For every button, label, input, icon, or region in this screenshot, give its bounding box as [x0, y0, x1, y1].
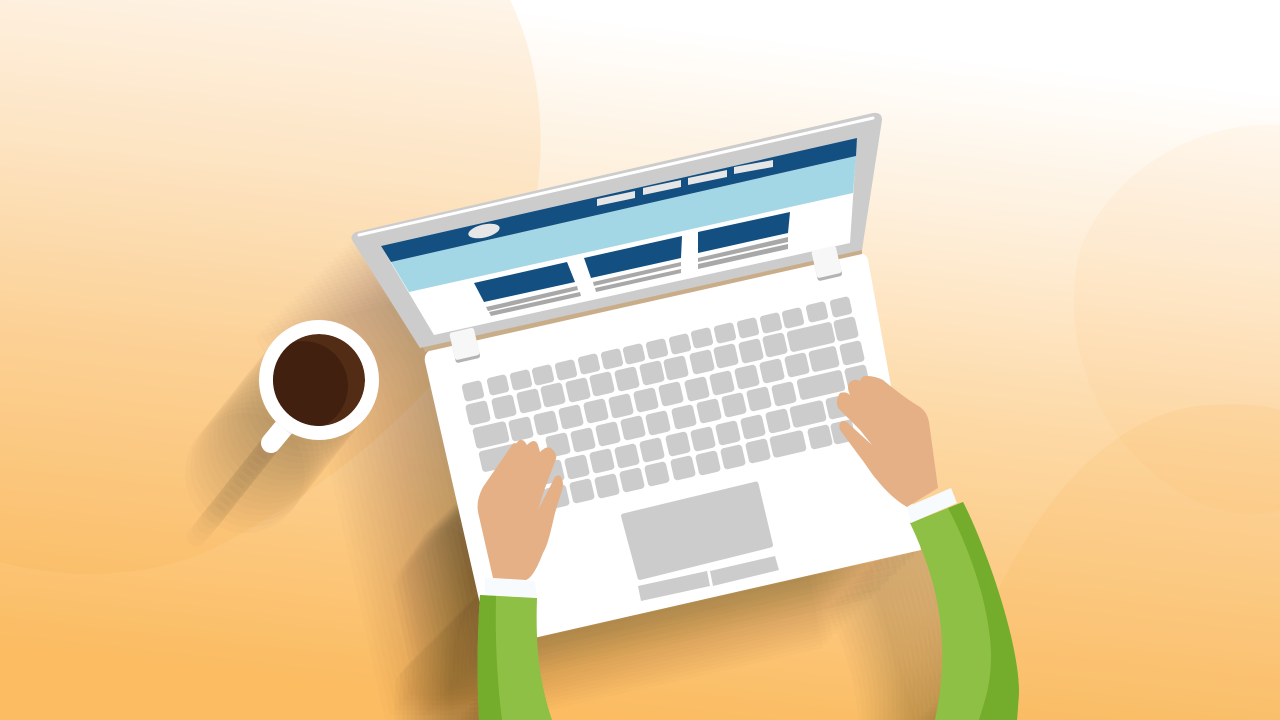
right hinge — [811, 245, 842, 281]
screen page — [381, 138, 857, 335]
left hinge — [449, 327, 480, 363]
right arm — [837, 376, 1019, 720]
long shadow: laptop — [254, 118, 916, 720]
website logo — [467, 221, 501, 241]
left hand — [478, 440, 563, 580]
touchpad left button — [638, 571, 710, 601]
long shadow: coffee cup — [185, 326, 374, 536]
website nav bar — [381, 138, 857, 262]
right sleeve shade — [948, 502, 1019, 720]
lid shadow on base — [423, 249, 862, 352]
right hand — [837, 376, 938, 507]
website card 2 — [584, 236, 682, 292]
long shadow: right arm — [826, 506, 996, 720]
website card 1 — [474, 262, 581, 316]
touchpad — [624, 484, 770, 578]
long shadow: left arm and hand — [393, 445, 559, 720]
laptop — [352, 113, 921, 648]
coffee surface — [273, 334, 365, 426]
left sleeve shade — [478, 595, 502, 720]
website menu items — [597, 160, 773, 206]
cup handle — [271, 412, 296, 443]
background blob: lower right — [965, 404, 1280, 720]
laptop lid — [352, 113, 882, 348]
lid highlight — [359, 118, 873, 235]
laptop base — [425, 254, 921, 648]
background blob: upper right — [1074, 125, 1280, 514]
right cuff — [907, 488, 957, 523]
keyboard — [461, 296, 870, 519]
background blob: left — [0, 0, 541, 574]
website hero band — [391, 156, 856, 292]
coffee cup — [258, 320, 379, 443]
left cuff — [485, 578, 537, 597]
website card 3 — [698, 212, 790, 269]
cup rim — [259, 320, 379, 440]
right sleeve — [910, 502, 1019, 720]
left sleeve — [478, 595, 552, 720]
touchpad right button — [710, 556, 779, 586]
left arm — [478, 440, 563, 720]
